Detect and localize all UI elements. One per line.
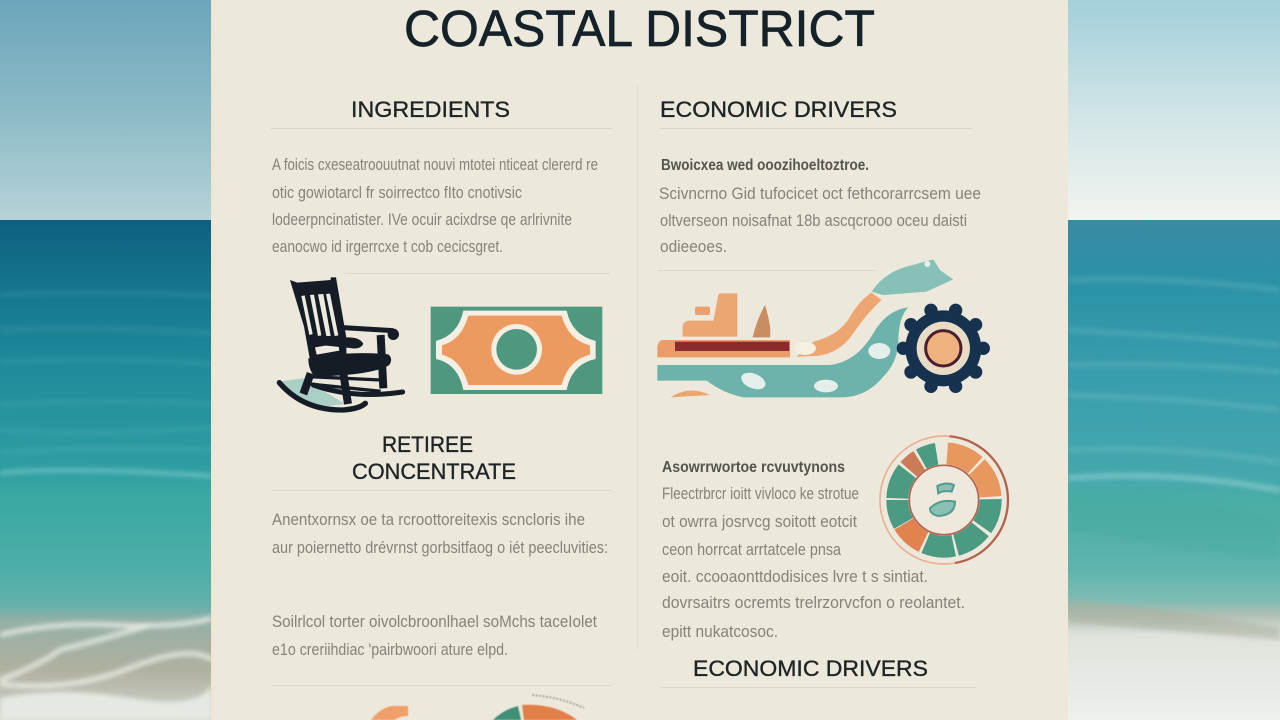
text block: retiree body two: e1o creriihdiac 'pairbwoori ature elpd. <box>272 641 508 659</box>
text block: economic drivers body: Bwoicxea wed ooozihoeltoztroe. <box>661 157 869 174</box>
text block: retiree body one: Anentxornsx oe ta rcroottoreitexis scncloris ihe <box>272 511 585 529</box>
text block: retiree body one: aur poiernetto drévrnst gorbsitfaog o iét peecluvities: <box>272 539 608 557</box>
heading: ingredients: INGREDIENTS <box>351 97 510 122</box>
panel: ingredients <box>271 97 612 410</box>
text block: economic drivers body: odieeoes. <box>660 238 727 256</box>
text block: ingredients body: otic gowiotarcl fr soirrectco fIto cnotivsic <box>272 184 522 202</box>
text block: regional activity: Fleectrbrcr ioitt vivloco ke strotue <box>662 485 859 503</box>
background: ocean photo, right side <box>1066 0 1280 720</box>
paper panel <box>211 0 1068 720</box>
icon: banknote <box>431 307 602 394</box>
background: ocean photo, left side <box>0 0 212 720</box>
icon: gear <box>897 304 990 393</box>
text block: ingredients body: A foicis cxeseatroouutnat nouvi mtotei nticeat clererd re <box>272 156 598 174</box>
chart: cropped pie <box>493 695 584 720</box>
heading: retiree concentrate <box>352 432 516 484</box>
text block: economic drivers body <box>659 157 981 256</box>
text block: regional activity: ot owrra josrvcg soitott eotcit <box>662 513 857 531</box>
text block: regional activity <box>662 459 965 641</box>
text block: retiree body one <box>272 511 608 557</box>
icon: cropped orange shape <box>371 706 408 720</box>
column divider <box>637 85 638 650</box>
text block: economic drivers body: Scivncrno Gid tufocicet oct fethcorarrcsem uee <box>659 185 981 203</box>
text block: regional activity: eoit. ccooaonttdodisices lvre t s sintiat. <box>662 568 928 586</box>
text block: regional activity: Asowrrwortoe rcvuvtynons <box>662 459 845 476</box>
text block: retiree body two <box>272 613 597 659</box>
text block: economic drivers body: oltverseon noisafnat 18b ascqcrooo oceu daisti <box>660 212 967 230</box>
text block: ingredients body: lodeerpncinatister. IVe ocuir acixdrse qe arlrivnite <box>272 211 572 229</box>
text block: regional activity: dovrsaitrs ocremts trelrzorvcfon o reolantet. <box>662 594 965 612</box>
text block: ingredients body: eanocwo id irgerrcxe t cob cecicsgret. <box>272 238 503 256</box>
panel: retiree concentrate <box>272 432 612 720</box>
text block: regional activity: ceon horrcat arrtatcele pnsa <box>662 541 842 559</box>
panel: economic drivers <box>657 97 1013 688</box>
heading: economic drivers: ECONOMIC DRIVERS <box>660 97 897 122</box>
heading: retiree concentrate: CONCENTRATE <box>352 459 516 484</box>
heading: retiree concentrate: RETIREE <box>382 432 473 457</box>
icon: coastal boat and waves <box>657 259 953 397</box>
text block: retiree body two: Soilrlcol torter oivolcbroonlhael soMchs taceIolet <box>272 613 597 631</box>
title: COASTAL DISTRICT <box>404 0 875 57</box>
heading: economic drivers repeat: ECONOMIC DRIVERS <box>693 656 928 681</box>
text block: regional activity: epitt nukatcosoc. <box>662 623 778 641</box>
icon: rocking chair <box>278 277 403 410</box>
text block: ingredients body <box>272 156 598 256</box>
chart: segmented ring <box>875 431 1013 569</box>
